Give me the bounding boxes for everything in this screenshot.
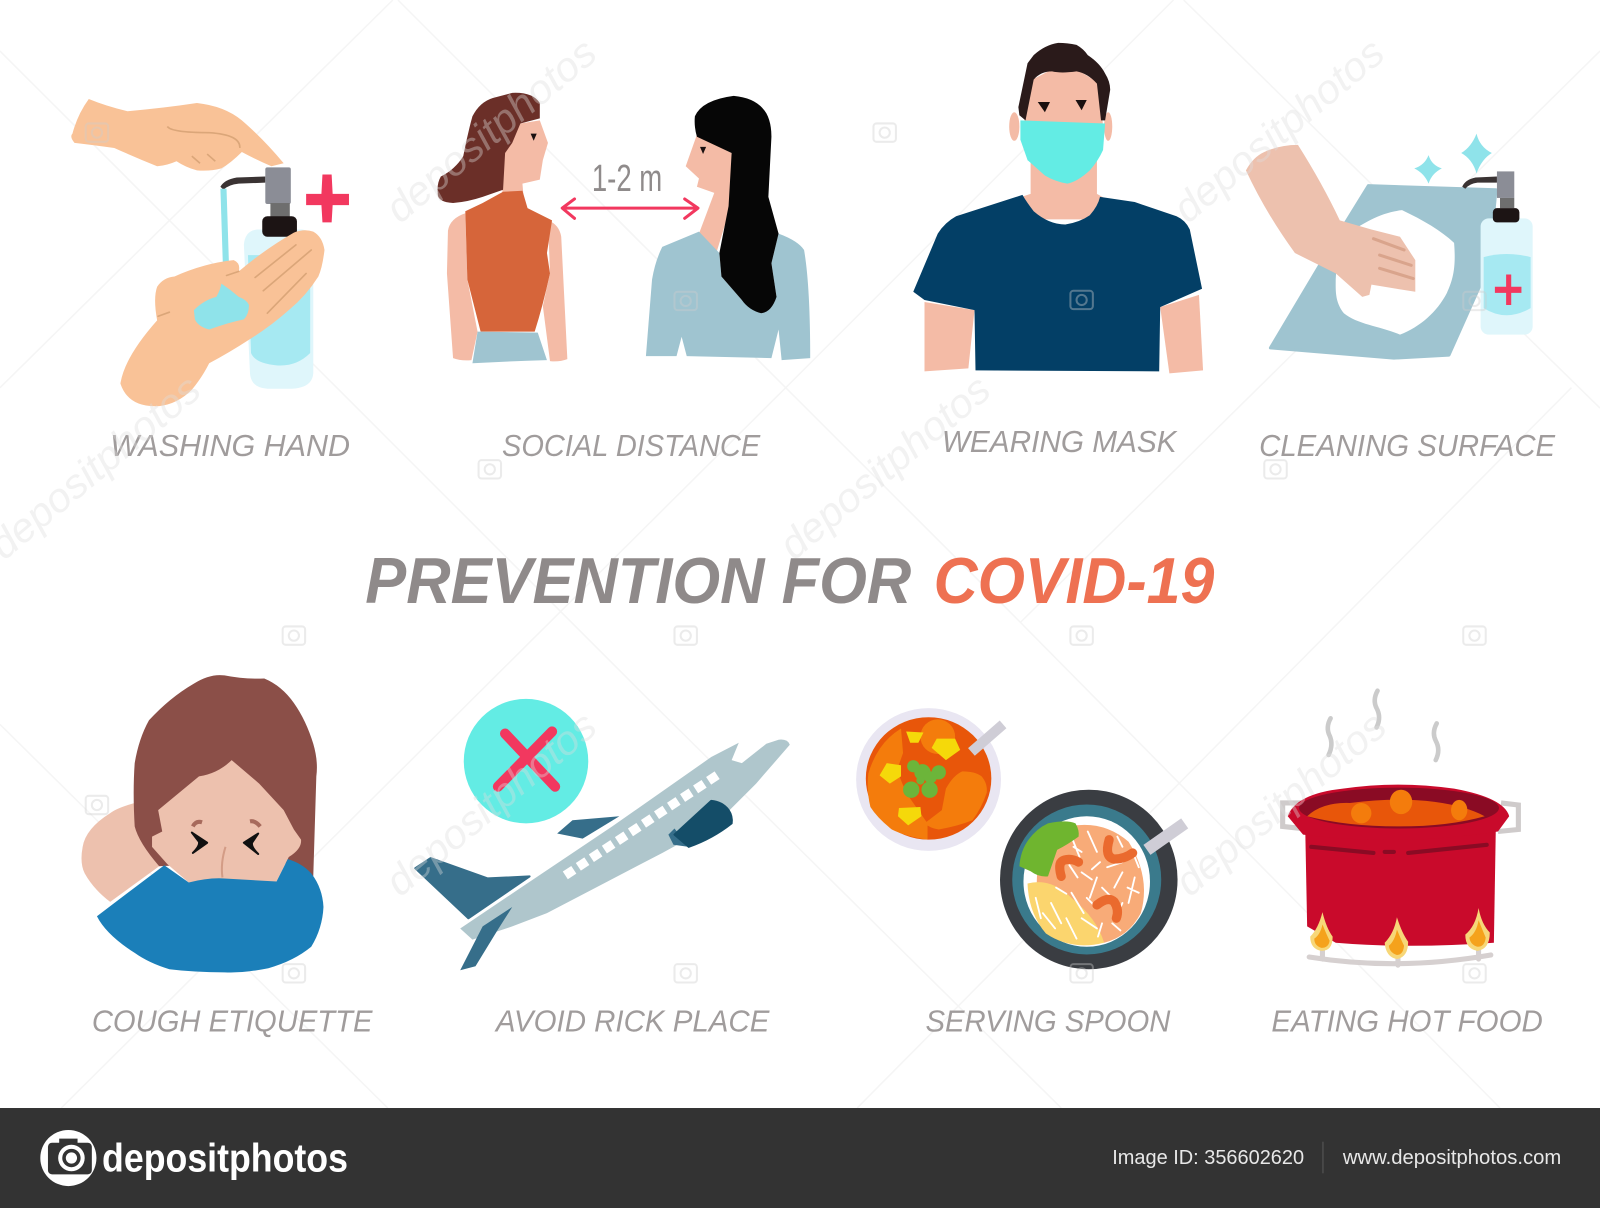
logo icon: camera [40, 1130, 96, 1186]
panel: cough etiquette [82, 675, 323, 972]
icon: wiping arm [1246, 145, 1415, 297]
panel: wearing mask [913, 43, 1203, 373]
icon: man head [1009, 43, 1112, 219]
panel: washing hand [71, 99, 349, 406]
label: social distance: SOCIAL DISTANCE [502, 429, 761, 463]
panel: social distance [438, 93, 810, 363]
watermarks: depositphotos [376, 702, 605, 905]
icon: burner stand [1309, 947, 1491, 965]
watermarks: depositphotos [376, 29, 605, 231]
icon: soup bowl [856, 708, 1003, 851]
label: washing hand: WASHING HAND [110, 429, 350, 463]
arrow: two way distance [562, 199, 698, 218]
footer bar [0, 1108, 1600, 1208]
label: serving spoon: SERVING SPOON [926, 1004, 1171, 1038]
title: COVID-19 [934, 544, 1215, 617]
icon: soap stream [220, 189, 230, 284]
watermarks: depositphotos [1166, 702, 1395, 905]
label: cleaning surface: CLEANING SURFACE [1259, 429, 1556, 463]
label: eating hot food: EATING HOT FOOD [1271, 1004, 1543, 1038]
icon: navy t-shirt [913, 195, 1202, 371]
icon: red pot [1288, 785, 1509, 946]
icon: noodle bowl [1000, 790, 1185, 969]
panel: cleaning surface [1246, 134, 1533, 358]
icon: sanitizer bottle [220, 167, 313, 389]
icon: woman with brown hair [438, 93, 567, 363]
label: cough etiquette: COUGH ETIQUETTE [92, 1004, 373, 1038]
icon: flames [1310, 908, 1490, 959]
icon: pot handles [1283, 803, 1518, 832]
icon: blue sleeve [97, 859, 323, 972]
icon: upper hand [71, 99, 284, 171]
label: wearing mask: WEARING MASK [942, 425, 1178, 459]
icon: lower hand [120, 230, 324, 406]
watermarks: depositphotos [770, 366, 999, 568]
icon: red plus [306, 174, 349, 222]
icon: face [152, 760, 301, 883]
icon: clean patch [1336, 210, 1455, 335]
label: avoid rick place: AVOID RICK PLACE [494, 1004, 770, 1038]
panel: serving spoon [856, 708, 1185, 969]
icon: face mask [1020, 120, 1105, 184]
icon: hair [134, 675, 317, 876]
image id: Image ID: 356602620 [1112, 1147, 1304, 1169]
title: PREVENTION FOR [365, 544, 911, 617]
panel: eating hot food [1283, 691, 1518, 965]
icon: sparkles [1414, 134, 1492, 184]
icon: surface [1270, 186, 1496, 358]
icon: no travel circle [464, 699, 588, 823]
icon: raised arm [82, 803, 159, 902]
distance label: 1-2 m [592, 157, 662, 199]
icon: woman with black hair [646, 96, 810, 360]
watermarks [0, 29, 1486, 983]
icon: soap blob [194, 284, 249, 330]
logo wordmark: depositphotos [102, 1136, 348, 1180]
title [365, 544, 1215, 617]
website: www.depositphotos.com [1342, 1147, 1561, 1169]
icon: small sanitizer bottle [1462, 171, 1533, 335]
icon: steam [1328, 691, 1438, 760]
icon: airplane [415, 740, 790, 970]
icon: arms [924, 295, 1203, 373]
watermarks: depositphotos [1164, 29, 1393, 231]
panel: avoid risk place [415, 699, 790, 970]
